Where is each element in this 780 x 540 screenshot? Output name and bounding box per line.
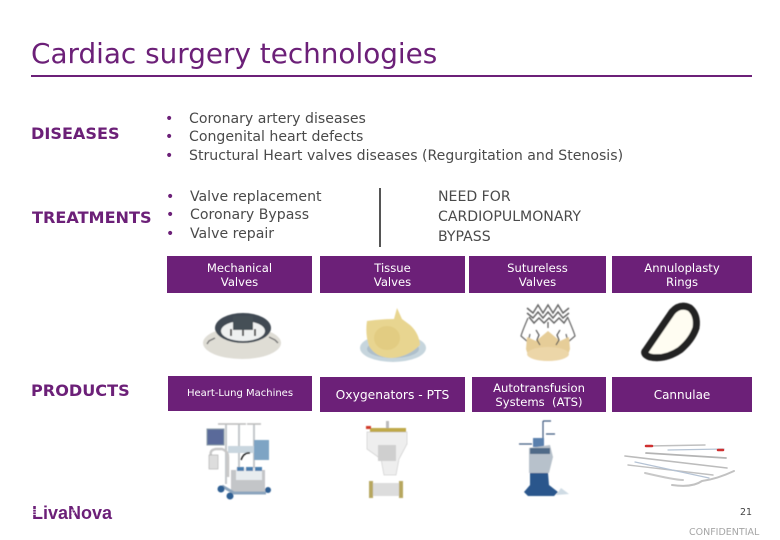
list: treatments: Coronary Bypass (190, 207, 309, 223)
button: annuloplasty rings (612, 256, 752, 293)
image: cannulae (625, 445, 734, 486)
page number: 21 (740, 507, 752, 518)
button: oxygenators: Oxygenators - PTS (336, 388, 449, 402)
image: annuloplasty ring (645, 306, 696, 358)
list: diseases (165, 110, 623, 164)
heading: treatments: TREATMENTS (32, 208, 152, 226)
button: oxygenators (320, 377, 465, 412)
button: tissue valves: Valves (374, 275, 411, 289)
button: heart-lung machines (168, 376, 312, 411)
title: Cardiac surgery technologies (31, 37, 437, 70)
image: oxygenator (366, 421, 407, 498)
list: diseases: Congenital heart defects (189, 129, 363, 145)
list: diseases: • (165, 148, 173, 164)
list: treatments: • (166, 207, 174, 223)
image: tissue valve (360, 308, 426, 362)
button: mechanical valves: Valves (221, 275, 258, 289)
button: heart-lung machines: Heart-Lung Machines (187, 388, 293, 399)
button: sutureless valves: Sutureless (507, 260, 568, 274)
vertical divider (379, 188, 381, 247)
image: autotransfusion system (519, 421, 569, 496)
title rule (31, 75, 752, 77)
image: sutureless valve (521, 305, 575, 361)
button: annuloplasty rings: Rings (666, 275, 698, 289)
button: cannulae: Cannulae (654, 388, 710, 402)
button: sutureless valves (469, 256, 606, 293)
list: treatments: Valve repair (190, 226, 274, 242)
text: need for cardiopulmonary bypass: CARDIOPULMONARY (438, 209, 581, 225)
image: heart-lung machine (207, 424, 271, 500)
button: autotransfusion systems: Autotransfusion (493, 380, 585, 394)
button: tissue valves: Tissue (374, 260, 411, 274)
button: mechanical valves (167, 256, 312, 293)
logo: LivaNova: LivaNova (32, 503, 113, 523)
heading: products: PRODUCTS (31, 380, 130, 400)
heading: diseases: DISEASES (31, 124, 120, 142)
button: autotransfusion systems (472, 377, 606, 412)
button: mechanical valves: Mechanical (207, 260, 272, 274)
text: need for cardiopulmonary bypass: NEED FOR (438, 189, 511, 205)
button: cannulae (612, 377, 752, 412)
button: tissue valves (320, 256, 465, 293)
list: treatments: Valve replacement (190, 188, 322, 204)
button: autotransfusion systems: Systems (ATS) (495, 395, 583, 409)
list: treatments: • (166, 188, 174, 204)
list: treatments (166, 188, 322, 242)
confidential label: CONFIDENTIAL (689, 527, 759, 538)
list: diseases: Coronary artery diseases (189, 110, 366, 126)
list: diseases: Structural Heart valves diseases (Regurgitation and Stenosis) (189, 148, 623, 164)
list: diseases: • (165, 129, 173, 145)
button: sutureless valves: Valves (519, 275, 556, 289)
image: mechanical valve (203, 313, 281, 359)
text: need for cardiopulmonary bypass: BYPASS (438, 229, 491, 245)
list: treatments: • (166, 226, 174, 242)
list: diseases: • (165, 110, 173, 126)
button: annuloplasty rings: Annuloplasty (644, 260, 720, 274)
text: need for cardiopulmonary bypass (438, 189, 581, 245)
